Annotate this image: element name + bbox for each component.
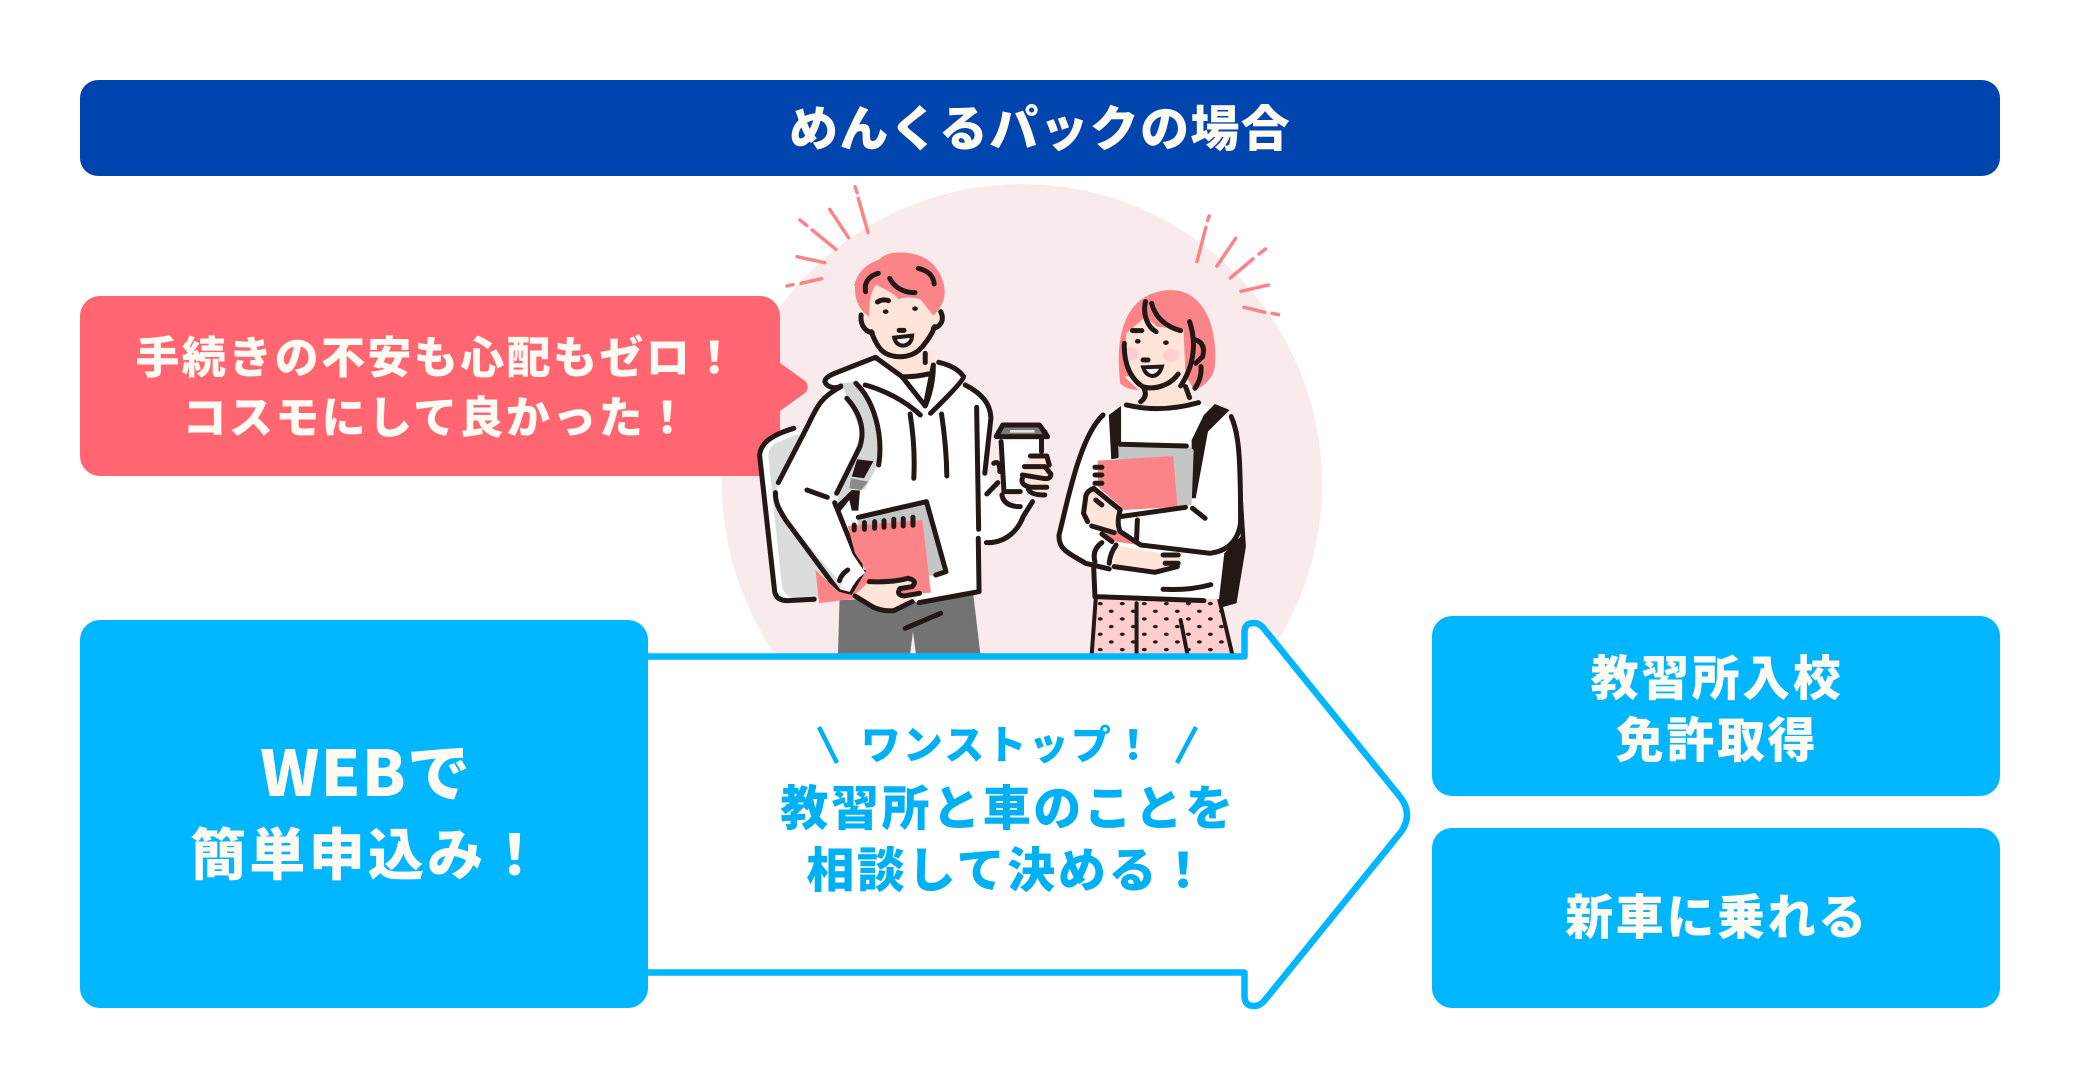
arrow xyxy=(630,623,1407,1006)
sweater outlines xyxy=(1059,403,1241,601)
box: web application: WEBで xyxy=(260,724,472,815)
illustration: two students xyxy=(760,187,1279,657)
backpack body xyxy=(1219,430,1246,607)
box: school enrollment: 免許取得 xyxy=(1616,701,1818,771)
neck xyxy=(1132,384,1192,406)
hands xyxy=(1084,488,1205,572)
hair strands, jaw xyxy=(1124,302,1203,402)
face xyxy=(1124,317,1186,388)
face details xyxy=(877,300,918,346)
speech bubble: コスモにして良かった！ xyxy=(182,382,692,446)
speech bubble: 手続きの不安も心配もゼロ！ xyxy=(135,322,739,386)
neck and face xyxy=(884,350,932,374)
arrow text: one stop: ワンストップ！ xyxy=(861,713,1155,771)
box: web application xyxy=(80,620,648,1008)
pants xyxy=(838,595,981,657)
backpack straps xyxy=(1109,404,1230,498)
face details xyxy=(1132,331,1169,376)
rays: woman xyxy=(1197,216,1279,315)
title bar: めんくるパックの場合 xyxy=(789,90,1291,161)
arrow text: main: 相談して決める！ xyxy=(806,831,1210,901)
backpack strap xyxy=(835,382,881,513)
box: school enrollment: 教習所入校 xyxy=(1590,639,1844,709)
background circle xyxy=(722,184,1322,784)
box: new car: 新車に乗れる xyxy=(1565,878,1869,948)
box: school enrollment xyxy=(1432,616,2000,796)
trouser crease xyxy=(905,613,941,628)
hoodie xyxy=(775,358,1031,603)
notebooks xyxy=(1095,444,1194,545)
title bar xyxy=(80,80,2000,176)
sweater xyxy=(1059,403,1241,599)
rays: man xyxy=(787,187,868,286)
man figure xyxy=(760,252,1051,657)
hair xyxy=(854,252,945,317)
box: new car xyxy=(1432,828,2000,1008)
hair strands, ears, jaw xyxy=(861,268,942,357)
coffee cup xyxy=(994,425,1051,507)
hoodie outlines xyxy=(775,353,1033,603)
woman figure xyxy=(1059,290,1246,657)
skirt xyxy=(1094,599,1230,654)
box: web application: 簡単申込み！ xyxy=(190,811,546,892)
notebooks xyxy=(815,502,947,603)
speech bubble xyxy=(80,296,808,476)
arrow text: main: 教習所と車のことを xyxy=(780,769,1236,839)
hand holding book xyxy=(854,578,920,611)
backpack xyxy=(757,426,842,604)
hair xyxy=(1119,290,1215,390)
arrow text: main xyxy=(780,769,1236,901)
